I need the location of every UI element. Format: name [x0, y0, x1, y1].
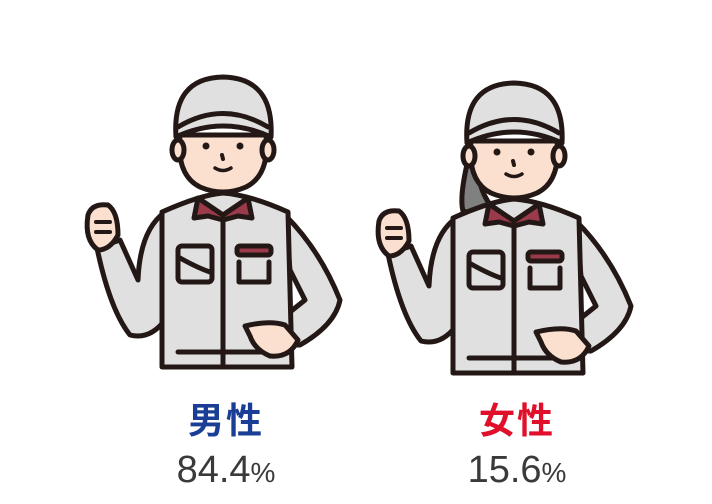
label: female: 女性 — [479, 400, 555, 441]
value: male: 84.4% — [177, 449, 275, 491]
value: female: 15.6% — [468, 449, 566, 491]
figure: man — [87, 77, 340, 367]
ponytail — [462, 156, 491, 213]
label: male: 男性 — [188, 400, 264, 441]
figure: woman — [378, 83, 631, 373]
